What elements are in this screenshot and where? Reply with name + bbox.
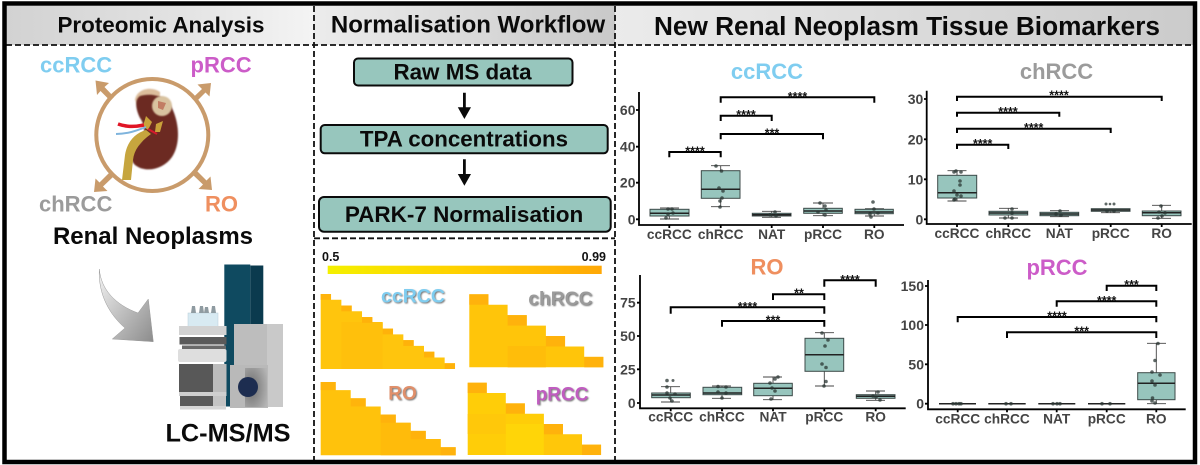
chart: pRCC boxplot: **** xyxy=(1047,310,1067,324)
chart: RO boxplot: 0 xyxy=(628,395,636,411)
chart: ccRCC boxplot: chRCC xyxy=(698,227,744,242)
chart: RO boxplot: *** xyxy=(766,314,780,328)
chart: chRCC boxplot: 10 xyxy=(908,171,924,187)
title: ccRCC: ccRCC xyxy=(731,59,803,84)
chart: ccRCC boxplot: **** xyxy=(685,144,705,158)
legend: colour scale: 0.5 xyxy=(322,250,339,264)
legend: colour scale: 0.99 xyxy=(582,250,606,264)
chart: chRCC boxplot: 30 xyxy=(908,91,924,107)
chart: pRCC boxplot: RO xyxy=(1146,411,1167,426)
title: RO: RO xyxy=(750,254,784,279)
chart: RO boxplot: ccRCC xyxy=(648,410,693,425)
panel: proteomic analysis xyxy=(39,53,291,448)
heading: Proteomic Analysis: Proteomic Analysis xyxy=(58,12,264,38)
arrow: step 1 to 2 xyxy=(458,93,471,119)
step: TPA concentrations: TPA concentrations xyxy=(360,127,568,152)
step: PARK-7 Normalisation: PARK-7 Normalisation xyxy=(345,202,583,227)
chart: chRCC boxplot: NAT xyxy=(1046,226,1073,241)
chart: pRCC boxplot: 0 xyxy=(916,396,924,412)
heading: New Renal Neoplasm Tissue Biomarkers: New Renal Neoplasm Tissue Biomarkers xyxy=(654,11,1160,41)
chart: RO boxplot: pRCC xyxy=(805,410,843,425)
chart: pRCC boxplot: *** xyxy=(1074,325,1089,339)
chart: chRCC boxplot: **** xyxy=(998,105,1018,119)
chart: ccRCC boxplot: RO xyxy=(864,227,885,242)
chart: ccRCC boxplot: **** xyxy=(788,90,807,104)
chart: ccRCC boxplot: ccRCC xyxy=(647,227,692,242)
title: chRCC: chRCC xyxy=(1020,59,1093,84)
chart: RO boxplot: NAT xyxy=(759,410,787,425)
heatmap: chRCC xyxy=(469,289,603,367)
heading: Normalisation Workflow: Normalisation Workflow xyxy=(331,12,605,38)
label: ccRCC: ccRCC xyxy=(381,286,445,308)
chart: chRCC boxplot: **** xyxy=(1024,121,1044,135)
chart: RO boxplot: 25 xyxy=(620,361,636,377)
chart: ccRCC boxplot xyxy=(620,59,904,242)
chart: chRCC boxplot: RO xyxy=(1151,226,1172,241)
chart: RO boxplot: 75 xyxy=(620,295,636,311)
chart: chRCC boxplot: 20 xyxy=(908,131,924,147)
chart: pRCC boxplot: 50 xyxy=(908,356,924,372)
chart: ccRCC boxplot: **** xyxy=(736,108,756,122)
label: chRCC: chRCC xyxy=(528,289,593,310)
chart: RO boxplot: **** xyxy=(840,273,860,287)
label: chRCC: chRCC xyxy=(39,192,112,217)
panel: normalisation workflow xyxy=(319,58,611,455)
step: Raw MS data xyxy=(354,58,572,86)
icon: kidney xyxy=(116,89,178,180)
legend: colour scale xyxy=(322,250,606,274)
chart: pRCC boxplot: NAT xyxy=(1043,411,1071,426)
chart: chRCC boxplot: pRCC xyxy=(1092,226,1130,241)
chart: pRCC boxplot: chRCC xyxy=(984,411,1030,426)
chart: RO boxplot: ** xyxy=(794,286,804,300)
icon: LC-MS/MS instrument xyxy=(178,264,283,410)
chart: chRCC boxplot: chRCC xyxy=(985,226,1031,241)
chart: ccRCC boxplot: pRCC xyxy=(804,227,842,242)
chart: chRCC boxplot: 0 xyxy=(916,211,924,227)
chart: ccRCC boxplot: 40 xyxy=(620,139,636,155)
title: pRCC: pRCC xyxy=(1026,255,1088,280)
chart: pRCC boxplot: pRCC xyxy=(1088,411,1126,426)
chart: chRCC boxplot xyxy=(908,59,1192,241)
arrow: curved grey xyxy=(99,269,153,342)
chart: pRCC boxplot: **** xyxy=(1097,294,1117,308)
label: LC-MS/MS: LC-MS/MS xyxy=(165,420,291,448)
label: ccRCC: ccRCC xyxy=(40,53,112,78)
chart: ccRCC boxplot: 0 xyxy=(628,211,636,227)
step: Raw MS data: Raw MS data xyxy=(393,59,532,84)
chart: RO boxplot xyxy=(620,254,906,425)
chart: ccRCC boxplot: 60 xyxy=(620,102,636,118)
chart: pRCC boxplot: ccRCC xyxy=(935,411,980,426)
step: TPA concentrations xyxy=(321,125,608,153)
chart: pRCC boxplot: *** xyxy=(1124,278,1139,292)
arrow: step 2 to 3 xyxy=(458,159,471,186)
chart: RO boxplot: RO xyxy=(865,410,886,425)
chart: RO boxplot: chRCC xyxy=(699,410,745,425)
heatmap: ccRCC xyxy=(321,286,455,369)
chart: RO boxplot: 50 xyxy=(620,328,636,344)
chart: chRCC boxplot: ccRCC xyxy=(935,226,980,241)
label: pRCC: pRCC xyxy=(536,385,589,406)
chart: ccRCC boxplot: NAT xyxy=(758,227,786,242)
icon: ring with four arrows xyxy=(94,79,212,192)
chart: pRCC boxplot xyxy=(901,255,1186,426)
step: PARK-7 Normalisation xyxy=(319,197,611,232)
chart: RO boxplot: **** xyxy=(738,300,757,314)
panel: header bands xyxy=(6,6,1194,45)
label: RO: RO xyxy=(205,192,238,217)
chart: pRCC boxplot: 100 xyxy=(901,317,924,333)
chart: pRCC boxplot: 150 xyxy=(901,278,924,294)
chart: chRCC boxplot: **** xyxy=(1049,88,1069,102)
label: pRCC: pRCC xyxy=(190,53,252,78)
heatmap: pRCC xyxy=(468,383,601,455)
heatmap: RO xyxy=(321,382,456,455)
chart: ccRCC boxplot: *** xyxy=(765,126,779,140)
label: Renal Neoplasms: Renal Neoplasms xyxy=(53,223,253,250)
label: RO: RO xyxy=(388,383,417,404)
chart: ccRCC boxplot: 20 xyxy=(620,175,636,191)
chart: chRCC boxplot: **** xyxy=(973,137,993,151)
